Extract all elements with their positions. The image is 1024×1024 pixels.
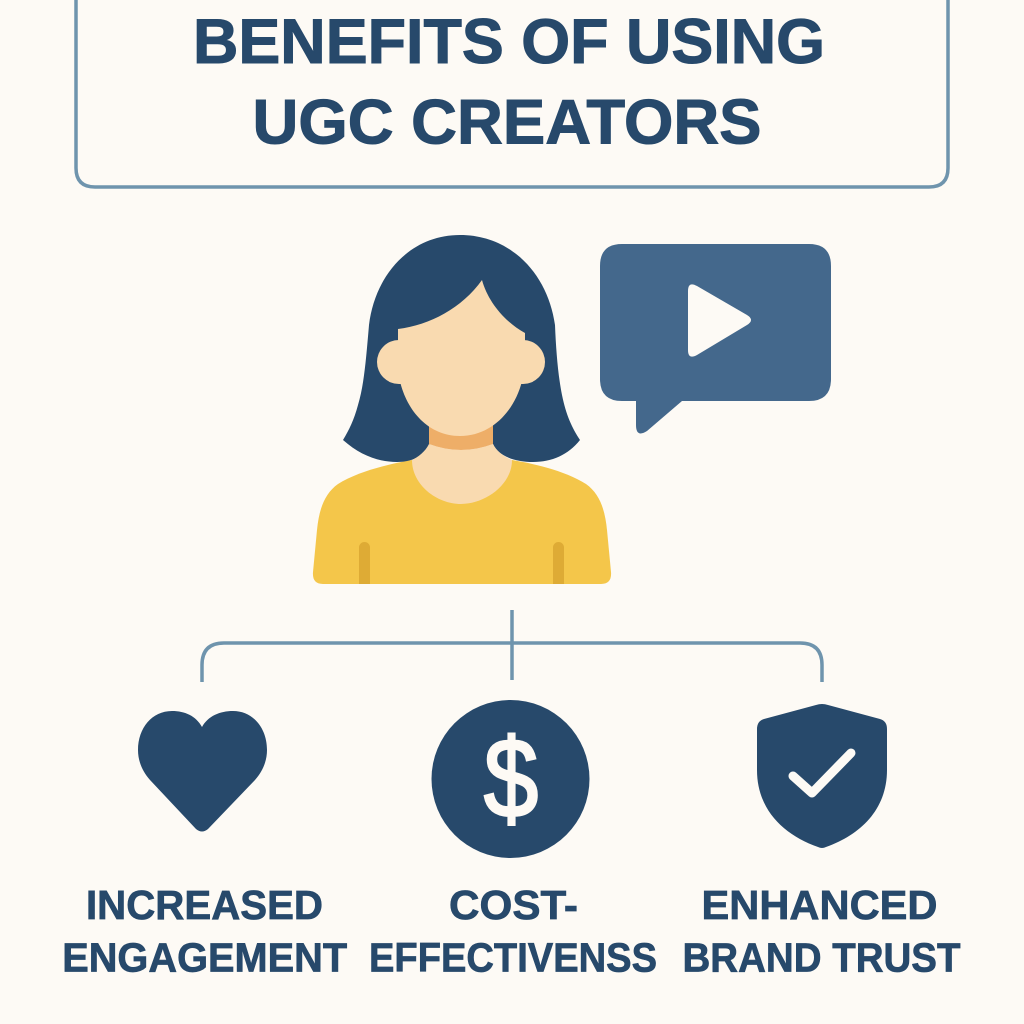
label: cost-effectiveness bbox=[369, 882, 657, 980]
icon: heart bbox=[138, 711, 267, 832]
label: enhanced brand trust bbox=[682, 882, 960, 980]
label: enhanced brand trust: ENHANCED bbox=[702, 882, 938, 928]
label: enhanced brand trust: BRAND TRUST bbox=[682, 934, 960, 980]
icon: shield with check bbox=[757, 704, 887, 848]
label: cost-effectiveness: EFFECTIVENSS bbox=[369, 934, 657, 980]
title: UGC CREATORS bbox=[252, 88, 762, 158]
ears bbox=[377, 340, 545, 384]
icon: creator person bbox=[313, 235, 611, 584]
hair bbox=[343, 235, 580, 462]
title box bbox=[76, 0, 948, 187]
neck and chest bbox=[412, 444, 512, 504]
label: increased engagement: ENGAGEMENT bbox=[62, 934, 347, 980]
connector lines bbox=[202, 610, 822, 682]
icon: dollar coin: $ bbox=[484, 716, 538, 841]
title bbox=[193, 7, 825, 158]
icon: play triangle bbox=[688, 284, 751, 357]
face bbox=[398, 280, 525, 436]
label: increased engagement bbox=[62, 882, 347, 980]
title: BENEFITS OF USING bbox=[193, 7, 825, 77]
label: increased engagement: INCREASED bbox=[86, 882, 323, 928]
collar shadow bbox=[429, 425, 493, 450]
shirt bbox=[313, 460, 611, 584]
icon: video speech bubble bbox=[600, 244, 831, 433]
icon: dollar coin bbox=[432, 700, 590, 858]
shirt seams bbox=[359, 542, 564, 584]
label: cost-effectiveness: COST- bbox=[449, 882, 578, 928]
